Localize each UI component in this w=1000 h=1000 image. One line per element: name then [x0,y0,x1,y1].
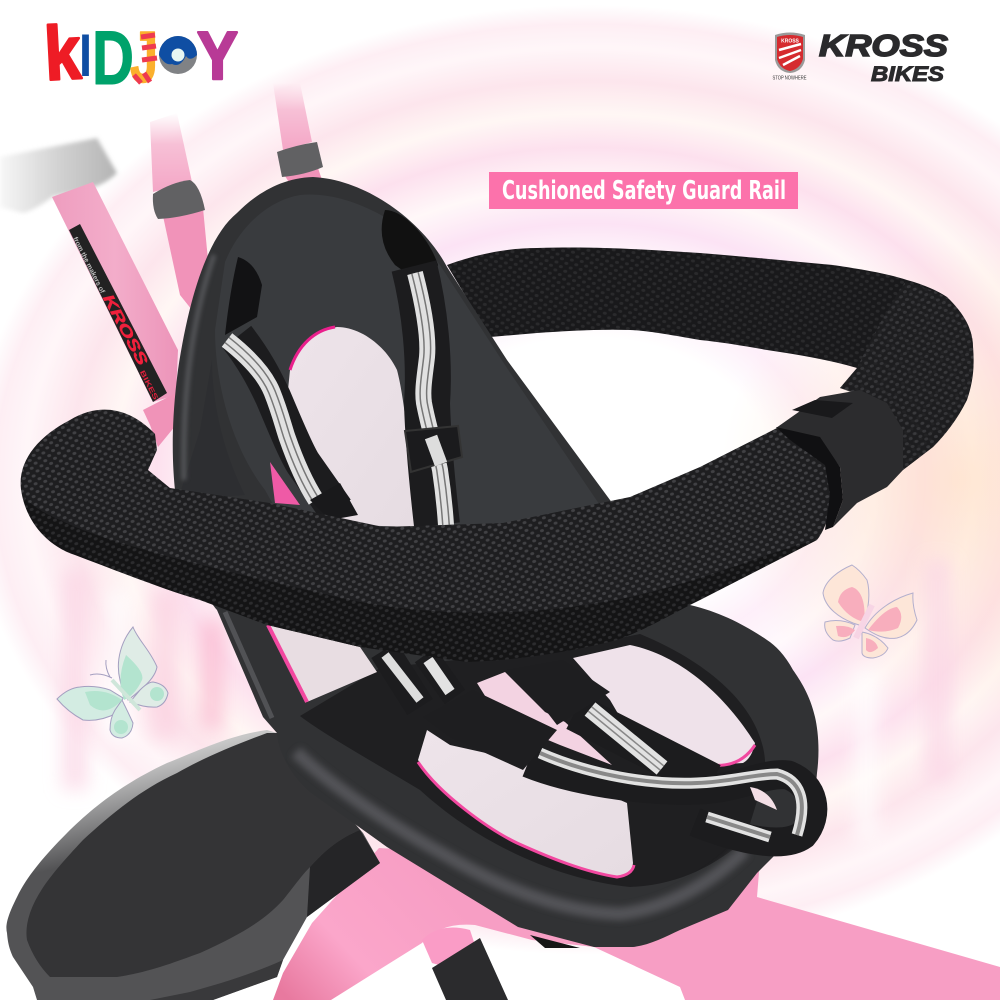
rail clamp collar [776,390,903,530]
seat pad right pink edge [712,745,755,765]
right strap slider [405,426,462,472]
lower back pad pink edge [268,625,307,702]
seat back inner panel [215,195,610,535]
post label: KROSS [99,291,151,368]
blurred handlebar grip [0,138,117,213]
caption tag: Cushioned Safety Guard Rail [489,172,798,209]
seat pad left [418,730,633,877]
pink sliver beside strap [270,462,300,505]
caption tag: Cushioned Safety Guard Rail: Cushioned Safety Guard Rail [502,176,786,206]
collar [277,142,323,177]
lower seat interior [300,634,765,887]
post label: BIKES [138,369,159,402]
seat pad centre [477,672,612,765]
logo: Kross Bikes [772,28,948,86]
strap slot right [382,210,438,290]
logo: Kidjoy: Y [197,18,238,94]
buckle lower [423,690,557,770]
clamp tab [792,400,853,418]
seat back left inner shadow [178,360,245,500]
slider white strip [431,437,441,464]
logo: Kidjoy [42,10,238,101]
fork tube [432,938,508,1000]
seat pad right [573,645,755,768]
buckle upper [507,660,610,725]
seat shell [173,177,818,947]
rear post right with collar [273,83,323,184]
logo: Kross Bikes: BIKES [871,63,944,86]
upper back pad [282,327,417,527]
padded guard rail, upper section [447,247,974,470]
butterfly: mint [57,627,168,738]
logo: Kidjoy: J [130,18,158,98]
logo: Kross Bikes: STOP NOWHERE [772,76,807,82]
left strap slider [310,483,358,520]
J candy stripes [134,35,157,83]
strap loop opening [750,787,777,810]
padded guard rail, front section [21,410,833,662]
Kross shield emblem: KROSS [781,38,800,44]
lower back pad [268,625,377,702]
seat pad left pink edge [418,762,634,877]
upper pad pink edge [290,327,335,370]
front handle post with KROSS label [52,182,178,447]
logo: Kidjoy: k [42,10,83,97]
collar [153,180,205,219]
strap slot left [225,257,262,335]
Kross shield emblem [775,32,805,73]
crotch straps and buckles [384,650,813,842]
front lip highlight [296,752,745,914]
post label: from the makers of [71,236,106,295]
rear post left with collar [150,113,208,315]
donut letter O [159,36,197,74]
harness strap left [227,337,358,520]
logo: Kidjoy: D [92,16,134,101]
logo: Kidjoy: I [79,22,92,89]
post label [69,224,167,402]
pink frame [273,848,1000,1000]
seat back left rim highlight [184,255,214,480]
harness strap right [405,266,462,525]
fork stem [422,928,476,968]
basket [6,730,380,1000]
main strap [528,763,813,842]
upper strap [575,712,712,782]
logo: Kross Bikes: KROSS [819,28,948,63]
butterfly: pink [823,565,917,658]
left side rim highlight [225,612,272,718]
